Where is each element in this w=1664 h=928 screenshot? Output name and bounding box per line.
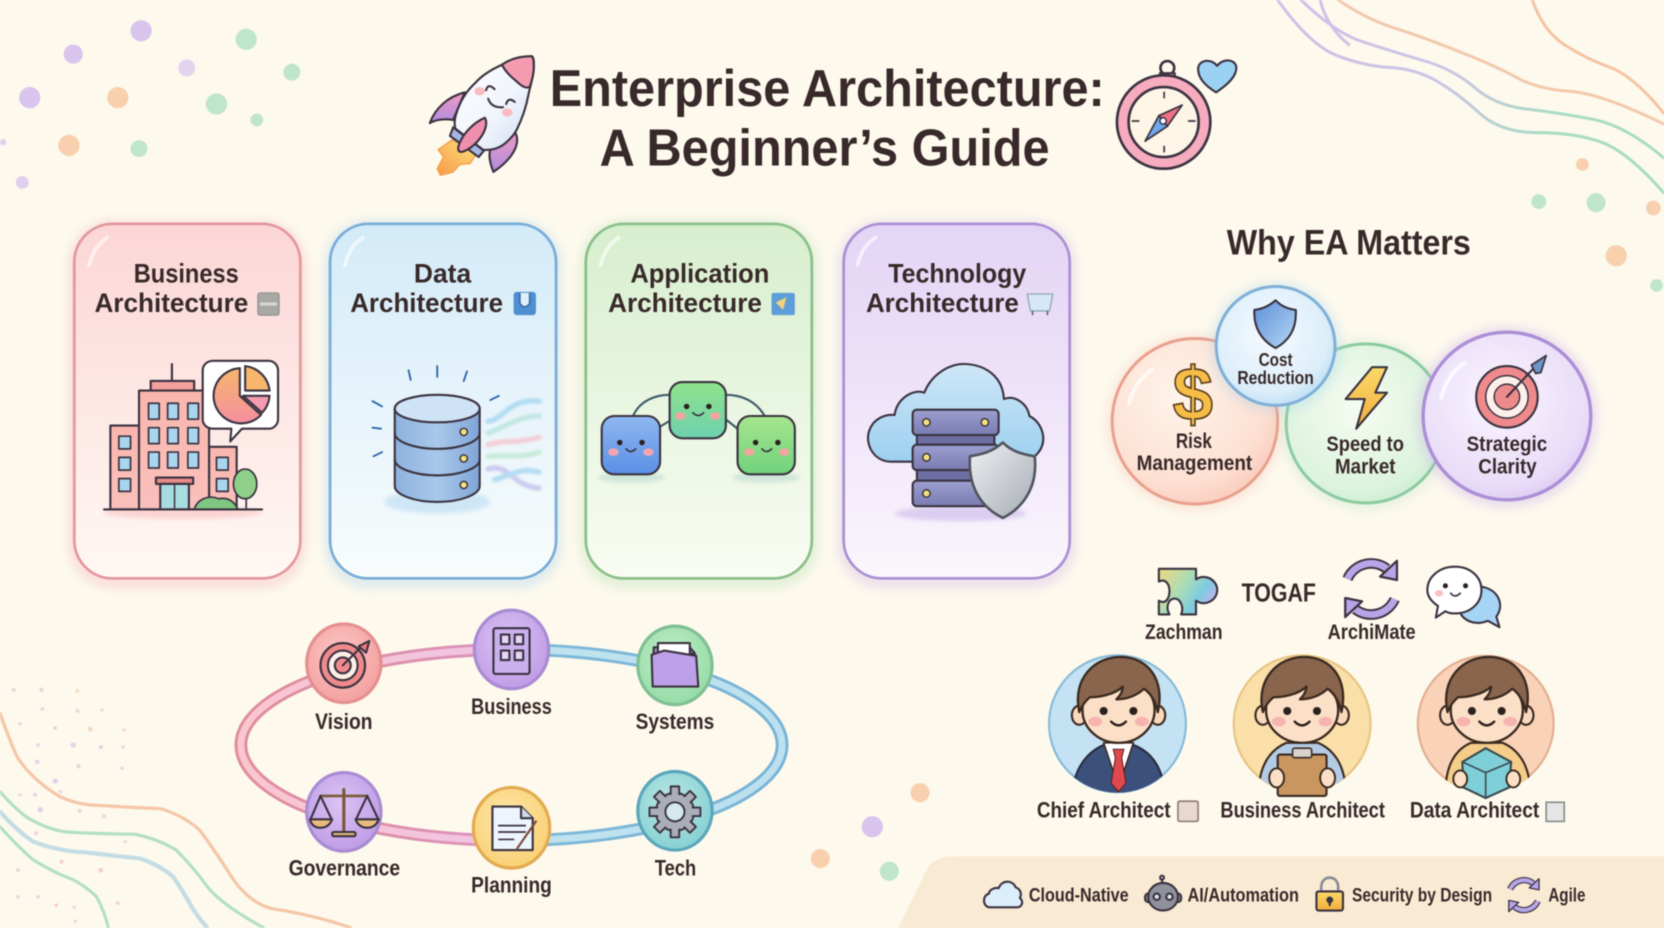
label: zachman: Zachman [1145, 621, 1223, 644]
panel: technology architecture [844, 224, 1070, 583]
person: data architect: Data Architect [1410, 798, 1540, 823]
panel: data architecture [330, 224, 556, 583]
node: tech [638, 772, 712, 881]
bubble: risk management: Management [1137, 452, 1252, 475]
person: business architect: Business Architect [1220, 798, 1385, 823]
heading: Architecture [866, 288, 1019, 318]
label: archimate: ArchiMate [1328, 621, 1416, 644]
person: chief architect: Chief Architect [1037, 798, 1171, 823]
confetti dots: top left [0, 20, 300, 189]
bubble: cost reduction: Reduction [1237, 368, 1314, 388]
heading: Data [414, 258, 471, 288]
heading [866, 258, 1053, 318]
node: governance [289, 773, 400, 881]
bubble: strategic clarity: Clarity [1478, 455, 1537, 478]
panel: business architecture [74, 224, 300, 583]
roadmap cycle [241, 610, 782, 897]
heading [350, 258, 536, 318]
title line 1: Enterprise Architecture: [550, 60, 1105, 118]
node: planning: Planning [471, 872, 552, 897]
node: governance: Governance [289, 856, 400, 881]
trend: security by design [1316, 878, 1492, 911]
bubble: speed to market: Market [1335, 455, 1396, 478]
icon: rocket [430, 56, 534, 175]
decorative waves: bottom left [0, 713, 350, 928]
loop track [241, 649, 782, 840]
bubble: strategic clarity: Strategic [1467, 433, 1547, 456]
icon: office building with chart [103, 361, 278, 519]
person: chief architect [1037, 655, 1198, 823]
team roles [1037, 655, 1564, 823]
person: business architect [1220, 655, 1385, 823]
frameworks row [1145, 561, 1500, 644]
icon: database [372, 366, 539, 514]
heading: Architecture [608, 288, 762, 318]
icon: chat bubbles [1427, 567, 1500, 627]
panel: application architecture [586, 224, 812, 583]
node: tech: Tech [655, 856, 696, 881]
speckle texture: bottom left [12, 688, 127, 923]
heading: Business [134, 258, 239, 288]
confetti dots: top right [1531, 158, 1663, 292]
bubble: speed to market [1286, 344, 1445, 504]
icon: cycle arrows [1345, 561, 1397, 617]
confetti dots: lower middle [811, 783, 930, 881]
node: systems [636, 626, 714, 734]
icon: compass [1117, 61, 1210, 169]
bubble: speed to market: Speed to [1327, 433, 1404, 456]
icon: puzzle piece [1159, 569, 1217, 614]
bubble: risk management [1112, 339, 1278, 505]
bubble: cost reduction [1215, 287, 1336, 408]
trend: agile: Agile [1548, 886, 1585, 907]
heading [94, 258, 279, 318]
node: planning [471, 787, 552, 897]
label: TOGAF: TOGAF [1242, 580, 1316, 608]
trend: security by design: Security by Design [1352, 886, 1492, 907]
trend: AI automation: AI/Automation [1188, 886, 1299, 907]
trend: agile [1509, 879, 1585, 912]
icon: connected app blocks [597, 382, 800, 483]
title line 2: A Beginner’s Guide [600, 120, 1050, 178]
node: vision: Vision [315, 709, 372, 734]
icon: heart [1198, 60, 1236, 92]
heading: Architecture [350, 288, 503, 318]
why EA matters bubble cluster [1112, 287, 1592, 505]
bubble: cost reduction: Cost [1259, 350, 1293, 370]
heading: Architecture [94, 288, 248, 318]
trend: cloud-native [984, 882, 1129, 907]
node: vision [307, 624, 381, 734]
heading: why EA matters: Why EA Matters [1227, 224, 1471, 263]
bubble: risk management: $ [1173, 352, 1213, 436]
heading: Application [630, 258, 769, 288]
trend: cloud-native: Cloud-Native [1029, 886, 1129, 907]
icon: cloud server with shield [868, 364, 1043, 521]
decorative waves: top right [1278, 0, 1664, 193]
heading: Technology [888, 258, 1026, 288]
title block [550, 60, 1105, 178]
bubble: risk management: Risk [1176, 430, 1212, 453]
node: business [471, 610, 552, 719]
bottom trends bar [898, 856, 1664, 928]
person: data architect [1410, 656, 1564, 823]
trend: AI automation [1145, 876, 1299, 911]
bubble: strategic clarity [1422, 332, 1592, 502]
heading [608, 258, 795, 318]
node: systems: Systems [636, 709, 714, 734]
node: business: Business [471, 694, 552, 719]
